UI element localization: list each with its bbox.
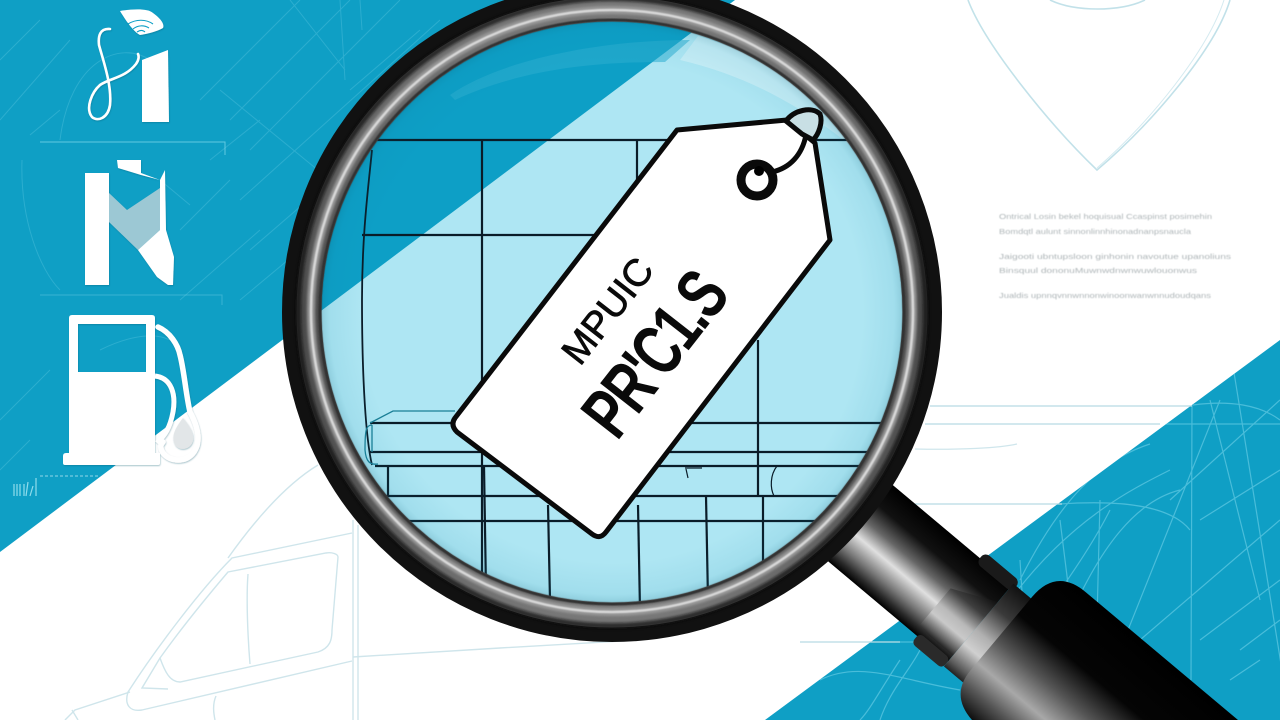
tag hole and string [741,110,821,196]
handle grip [961,581,1238,720]
faint horizontal lines right [800,406,1192,642]
icon: cable and wifi [89,9,169,122]
rim highlight [311,10,913,612]
rim inner edge [320,20,904,604]
faint body text right: Jualdis upnnqvnnwnnonwinoonwanwnnudoudqans [999,291,1211,300]
panel: blue triangle bottom right [765,340,1280,720]
rim metal [309,9,915,615]
tag label large: PR'C1.S [566,257,744,452]
rim outer black [291,0,933,633]
lens edge shading [321,21,903,603]
lens grid lines [362,140,890,610]
handle shaft and collar [804,463,1039,687]
faint car outline bottom left [65,465,640,720]
magnifying glass rim [291,0,933,633]
lens sofa sketch [365,411,455,464]
icon: abstract N shape [85,160,174,285]
texture: sketched lines bottom right [820,360,1280,720]
faint body text right [999,212,1231,300]
lens lighter glare [450,40,690,100]
price tag [453,110,830,537]
faint body text right: Bomdqtl aulunt sinnonlinnhinonadnanpsnaucla [999,227,1192,236]
rim soft glow [311,10,913,612]
icon: fuel pump [63,315,198,465]
faint body text right: Jaigooti ubntupsloon ginhonin navoutue upanoliuns [999,252,1231,261]
tag body [453,120,830,537]
divider lines left column [40,142,225,476]
rim outer shadow [298,0,926,626]
lens blue band [322,22,692,310]
small marks bottom left [14,478,36,496]
tag label small: MPUIC [554,250,662,373]
magnifying glass lens [322,22,902,602]
texture: sketched lines top left [0,0,470,470]
lens tint background [322,32,902,602]
faint body text right: Binsquul dononuMuwnwdnwnwuwlouonwus [999,266,1197,275]
magnifying glass handle [804,463,1238,720]
faint shield outline top right [968,0,1230,170]
panel: blue triangle top left [0,0,735,552]
faint body text right: Ontrical Losin bekel hoquisual Ccaspinst posimehin [999,212,1212,221]
